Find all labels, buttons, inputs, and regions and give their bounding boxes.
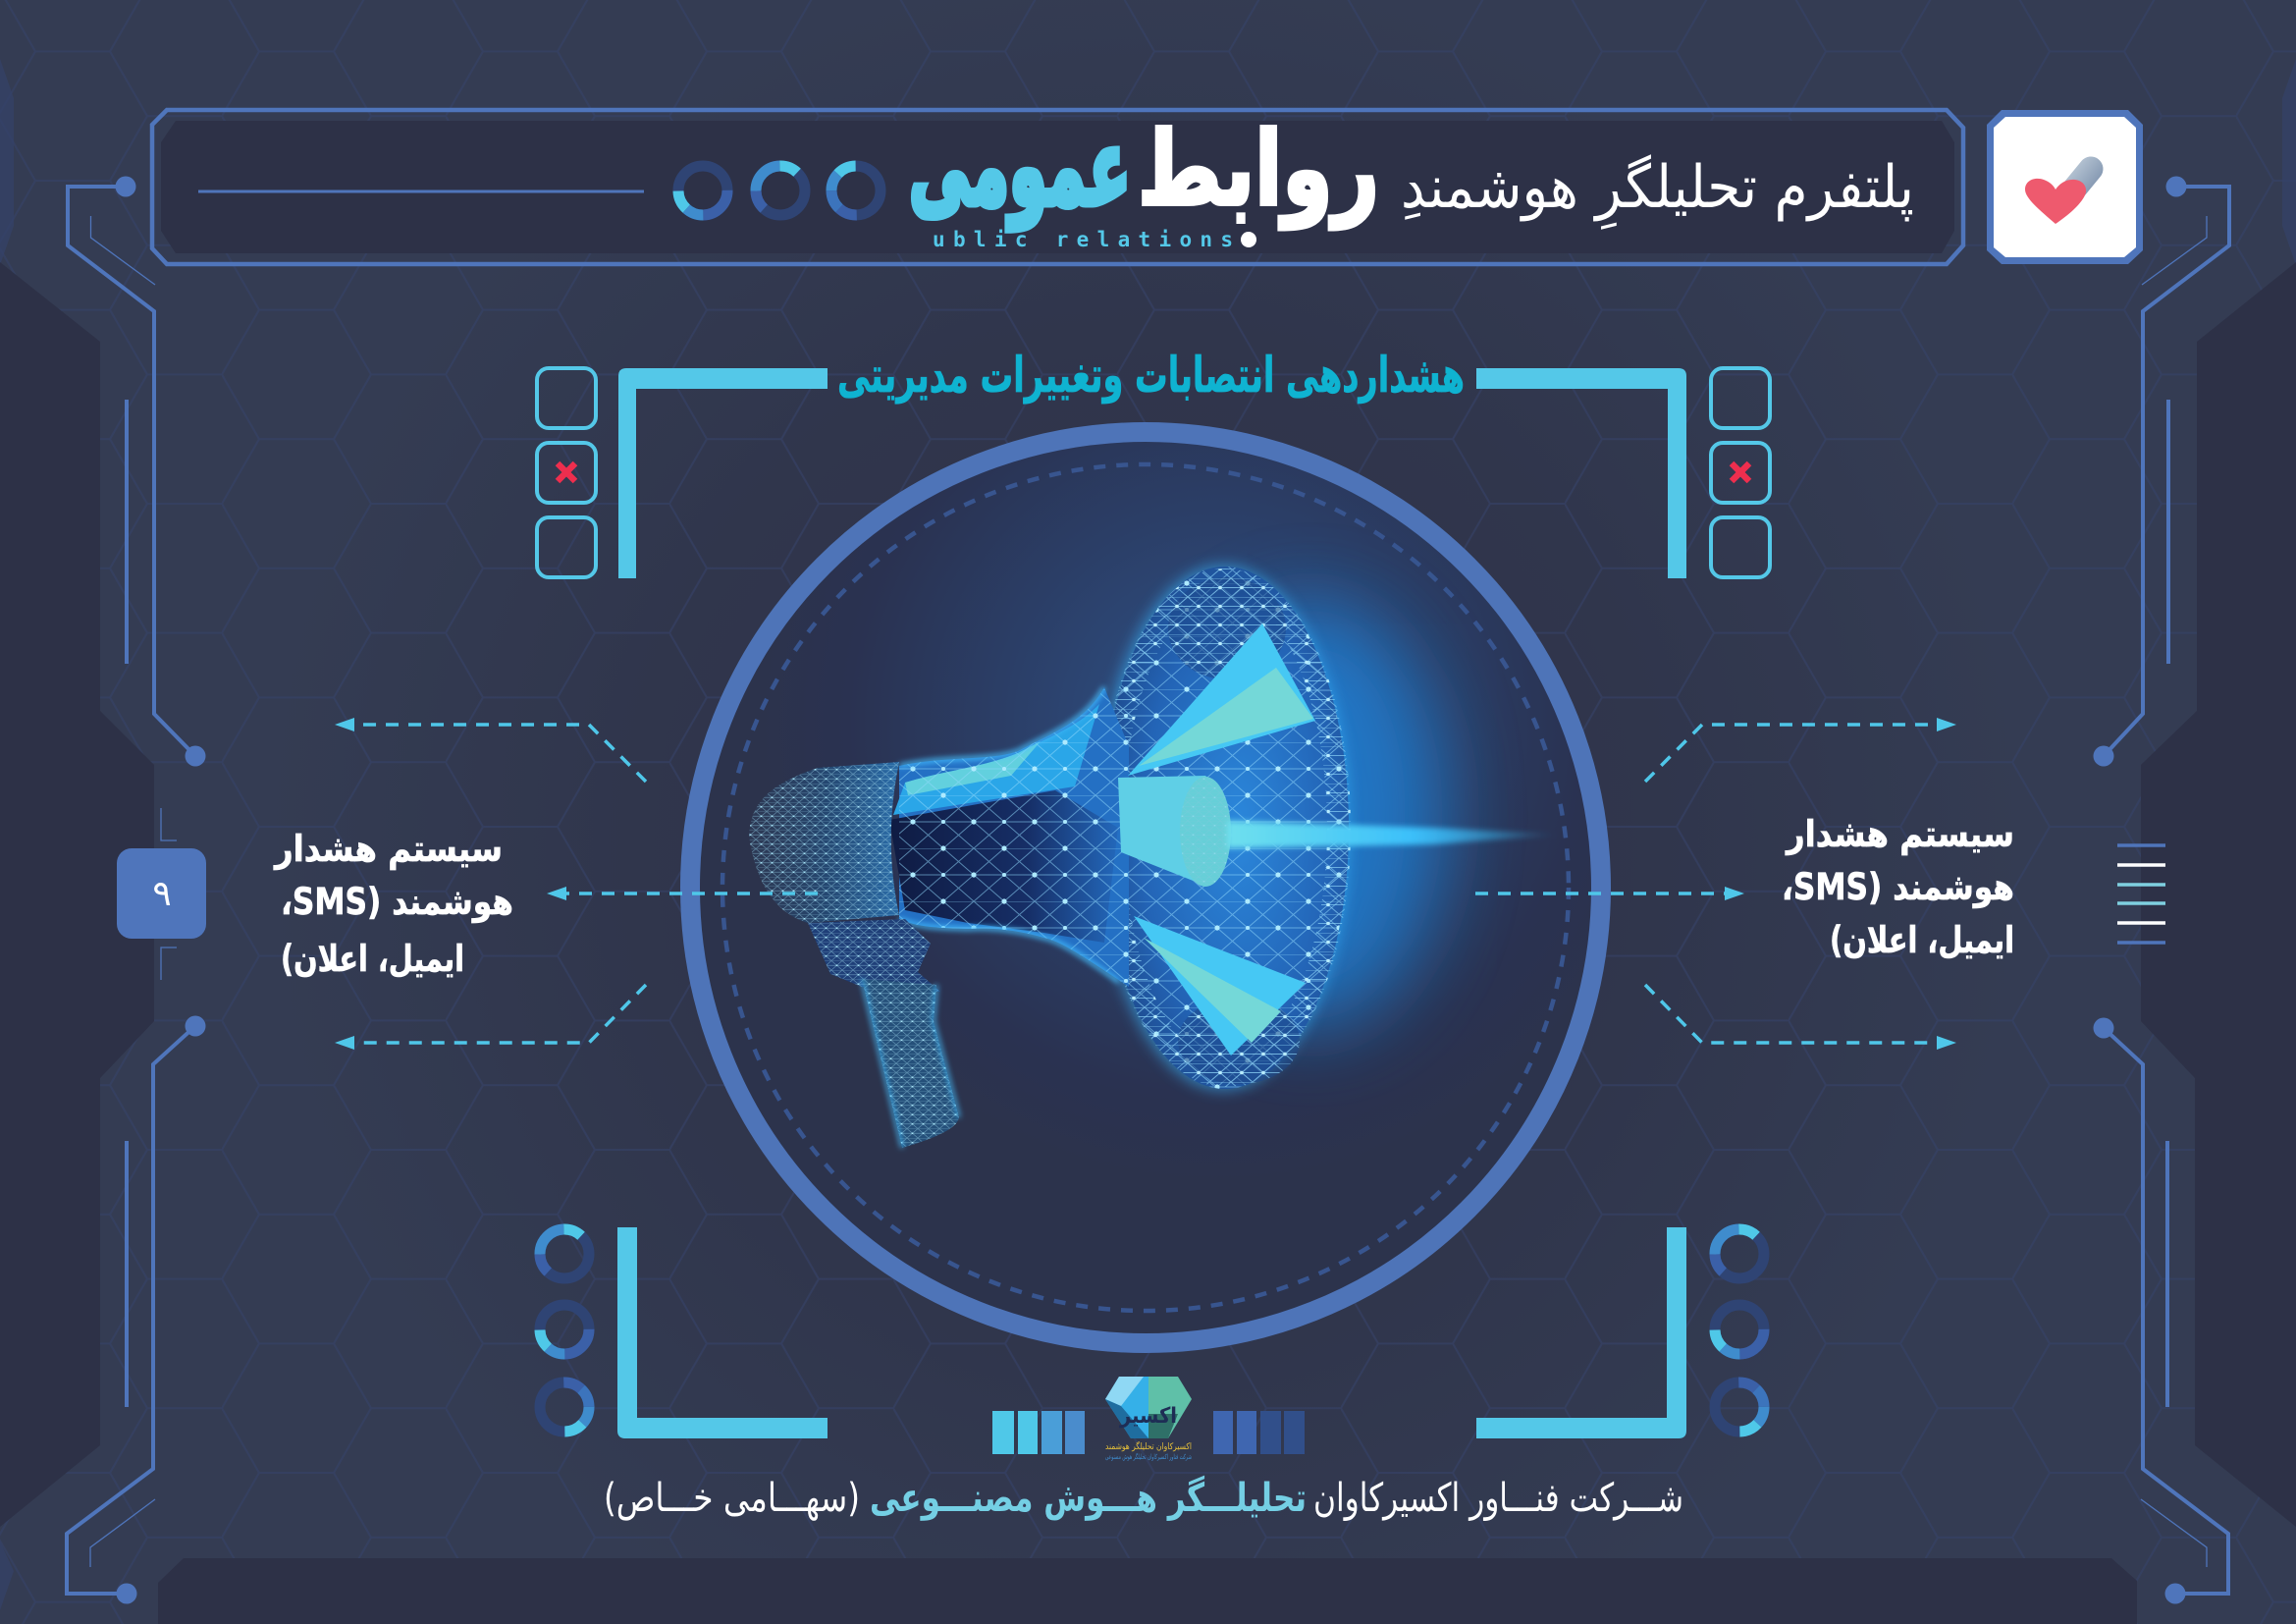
right lower rings bbox=[1715, 1229, 1764, 1432]
footer company name bbox=[604, 1475, 1683, 1521]
company logo gem: اکسیر bbox=[1119, 1404, 1177, 1429]
glow bbox=[1178, 604, 1443, 1026]
horn mouth cylinder bbox=[1118, 776, 1231, 887]
page number badge: ۹ bbox=[152, 874, 172, 914]
horn neck bbox=[889, 687, 1129, 987]
dashed arrows left bbox=[335, 718, 818, 1050]
company logo gem: شرکت فناور اکسیرکاوان تحلیلگر هوش مصنوعی bbox=[1105, 1452, 1192, 1461]
right text block: هوشمند (SMS، bbox=[1782, 866, 2014, 908]
header rule bbox=[198, 190, 644, 192]
light wedges bbox=[1128, 623, 1315, 1056]
right text block bbox=[1782, 813, 2014, 961]
left text block: هوشمند (SMS، bbox=[281, 881, 513, 923]
header frame bbox=[152, 110, 1963, 264]
right text block: سیستم هشدار bbox=[1785, 813, 2014, 855]
side lines decoration bbox=[2117, 845, 2165, 943]
central circle bbox=[690, 432, 1601, 1343]
megaphone illustration bbox=[749, 565, 1561, 1148]
company logo gem: اکسیرکاوان تحلیلگر هوشمند bbox=[1105, 1440, 1192, 1452]
right circuit lines bbox=[2093, 177, 2229, 1604]
footer company name: شـــرکت فنـــاور اکسیرکاوان bbox=[1313, 1476, 1683, 1521]
handle bbox=[862, 979, 959, 1148]
light beam bbox=[1227, 821, 1561, 848]
left text block: ایمیل، اعلان) bbox=[281, 938, 464, 980]
left bars bbox=[992, 1411, 1085, 1454]
dashed arrows right bbox=[1475, 718, 1956, 1050]
rear cap bbox=[749, 762, 940, 992]
left lower rings bbox=[540, 1229, 589, 1432]
logotype: public relations bbox=[909, 107, 1379, 251]
left text block bbox=[273, 828, 513, 980]
left status boxes bbox=[537, 368, 596, 577]
corner brackets bbox=[617, 368, 1686, 1438]
logotype: public relations: عمومی bbox=[909, 107, 1131, 231]
header rings bbox=[678, 166, 881, 215]
icon: heart badge bbox=[1987, 110, 2143, 264]
header inner panel bbox=[161, 121, 1954, 253]
horn bbox=[1096, 565, 1350, 1091]
right status boxes bbox=[1711, 368, 1770, 577]
left text block: سیستم هشدار bbox=[273, 828, 503, 870]
right bars bbox=[1213, 1411, 1305, 1454]
page number badge bbox=[117, 848, 206, 939]
logotype: public relations: ublic relations bbox=[933, 228, 1233, 251]
footer company name: (سهـــامی خـــاص) bbox=[604, 1476, 860, 1521]
logotype: public relations: روابط bbox=[1138, 109, 1379, 230]
right text block: ایمیل، اعلان) bbox=[1830, 919, 2014, 961]
header title: پلتفرم تحلیلگرِ هوشمندِ bbox=[1401, 153, 1914, 231]
section heading: هشداردهی انتصابات وتغییرات مدیریتی bbox=[837, 347, 1465, 405]
left circuit lines bbox=[67, 177, 206, 1604]
header panel bbox=[152, 107, 1963, 264]
footer company name: تحلیلـــگر هـــوش مصنـــوعی bbox=[870, 1475, 1307, 1521]
company logo gem bbox=[1105, 1377, 1192, 1461]
